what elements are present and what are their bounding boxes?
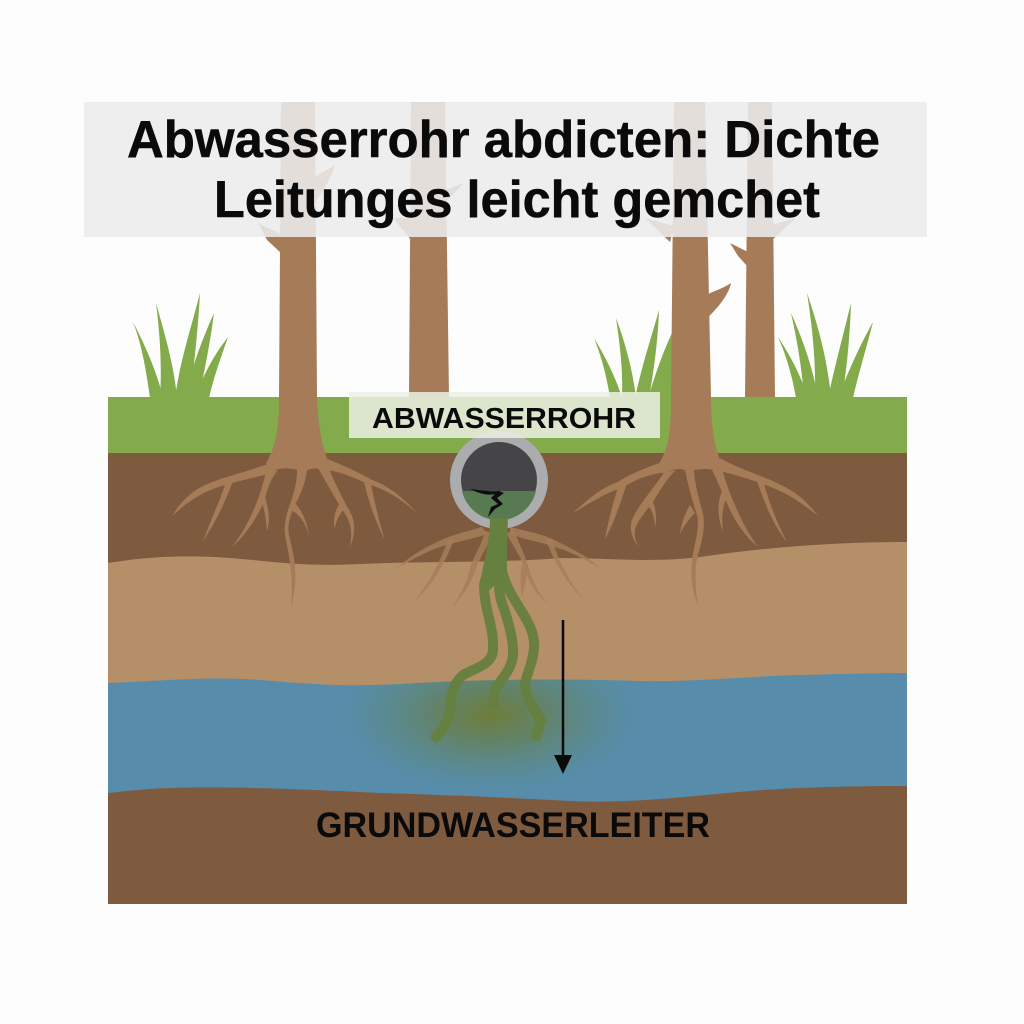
title band — [84, 102, 927, 237]
ground layers — [108, 397, 907, 904]
crack — [470, 489, 504, 517]
aquifer contamination glow — [358, 680, 622, 784]
arrow: flow downward — [554, 620, 572, 774]
label: Abwasserrohr — [349, 392, 660, 438]
grass clump left — [133, 293, 228, 398]
leaking sewage strands — [433, 518, 541, 740]
sand layer — [108, 542, 907, 690]
label: Abwasserrohr: ABWASSERROHR — [372, 403, 636, 435]
roots of tree 3 — [573, 458, 818, 606]
tree 4 — [730, 102, 796, 397]
grass clump right — [778, 293, 873, 398]
title — [127, 111, 880, 229]
aquifer water layer — [108, 673, 907, 802]
title: Leitunges leicht gemchet — [214, 171, 820, 229]
label: Grundwasserleiter: GRUNDWASSERLEITER — [316, 806, 710, 845]
tree 2 — [409, 102, 449, 397]
grass clump middle — [594, 310, 672, 398]
pipe interior — [461, 442, 537, 518]
tree 2 branches — [393, 183, 464, 240]
tree 3 — [573, 102, 818, 606]
sewage stem — [480, 518, 508, 590]
roots of tree 1 — [172, 458, 417, 607]
tree 1 — [172, 102, 417, 607]
pipe wall — [450, 431, 548, 529]
infographic scene — [84, 102, 927, 904]
sewage inside pipe — [462, 491, 536, 520]
pipe roots — [397, 527, 600, 607]
sewer pipe — [450, 431, 548, 529]
green grass strip — [108, 397, 907, 453]
deep soil layer — [108, 453, 907, 904]
title: Abwasserrohr abdicten: Dichte — [127, 111, 880, 169]
